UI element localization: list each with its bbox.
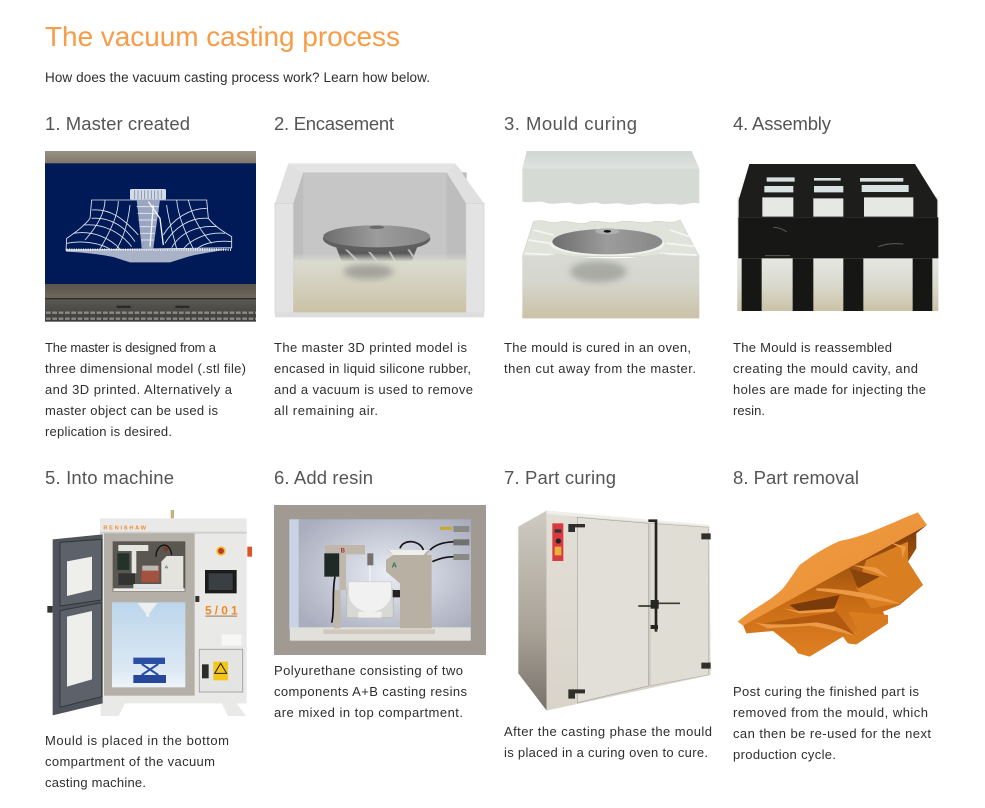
image: resin mixing compartment: A: [392, 560, 398, 569]
description: step 7: After the casting phase the mould: [504, 724, 712, 739]
description: step 5: [45, 733, 229, 790]
title: The vacuum casting process: [45, 21, 400, 52]
description: step 1: [45, 340, 246, 439]
heading: step 7: 7. Part curing: [504, 467, 616, 488]
intro text: How does the vacuum casting process work? Learn how below.: [45, 70, 430, 85]
image: taped mould block: [737, 164, 938, 311]
description: step 4: creating the mould cavity, and: [733, 361, 918, 376]
description: step 6: components A+B casting resins: [274, 684, 468, 699]
description: step 4: The Mould is reassembled: [733, 340, 892, 355]
description: step 7: is placed in a curing oven to cure.: [504, 745, 708, 760]
description: step 1: replication is desired.: [45, 424, 172, 439]
description: step 6: Polyurethane consisting of two: [274, 663, 463, 678]
image: cured mould cut open: [522, 151, 699, 318]
description: step 2: and a vacuum is used to remove: [274, 382, 473, 397]
description: step 8: removed from the mould, which: [733, 705, 928, 720]
description: step 5: casting machine.: [45, 775, 146, 790]
image: wireframe impeller on laptop screen: [45, 151, 256, 322]
description: step 2: encased in liquid silicone rubber,: [274, 361, 471, 376]
description: step 6: are mixed in top compartment.: [274, 705, 463, 720]
step 6: add resin: [274, 467, 486, 720]
description: step 1: The master is designed from a: [45, 340, 217, 355]
description: step 1: and 3D printed. Alternatively a: [45, 382, 233, 397]
heading: step 2: 2. Encasement: [274, 113, 394, 134]
description: step 5: Mould is placed in the bottom: [45, 733, 229, 748]
image: curing oven: [518, 511, 711, 711]
heading: step 3: 3. Mould curing: [504, 113, 637, 134]
description: step 8: Post curing the finished part is: [733, 684, 920, 699]
heading: step 6: 6. Add resin: [274, 467, 373, 488]
heading: step 5: 5. Into machine: [45, 467, 174, 488]
image: finished orange part: [738, 512, 927, 657]
description: step 5: compartment of the vacuum: [45, 754, 215, 769]
step 2: encasement: [274, 113, 484, 418]
image: vacuum casting machine: 5/01: [205, 604, 238, 618]
description: step 1: three dimensional model (.stl file): [45, 361, 246, 376]
description: step 6: [274, 663, 468, 720]
description: step 8: production cycle.: [733, 747, 836, 762]
description: step 4: [733, 340, 926, 418]
image: resin mixing compartment: [274, 505, 486, 655]
image: vacuum casting machine: [47, 510, 252, 716]
description: step 3: The mould is cured in an oven,: [504, 340, 691, 355]
heading: step 4: 4. Assembly: [733, 113, 832, 134]
description: step 8: [733, 684, 931, 762]
heading: step 1: 1. Master created: [45, 113, 190, 134]
description: step 3: [504, 340, 696, 376]
step 1: master created: [45, 113, 256, 439]
description: step 1: master object can be used is: [45, 403, 218, 418]
description: step 8: can then be re-used for the next: [733, 726, 931, 741]
description: step 2: all remaining air.: [274, 403, 378, 418]
step 5: into machine: [45, 467, 252, 790]
description: step 2: The master 3D printed model is: [274, 340, 468, 355]
step 4: assembly: [733, 113, 938, 418]
image: vacuum casting machine: RENISHAW: [103, 526, 147, 532]
step 3: mould curing: [504, 113, 699, 376]
step 7: part curing: [504, 467, 712, 760]
description: step 4: holes are made for injecting the: [733, 382, 926, 397]
image: master encased in silicone rubber: [275, 163, 484, 317]
description: step 2: [274, 340, 473, 418]
step 8: part removal: [733, 467, 931, 762]
description: step 4: resin.: [733, 403, 765, 418]
description: step 3: then cut away from the master.: [504, 361, 696, 376]
heading: step 8: 8. Part removal: [733, 467, 859, 488]
image: resin mixing compartment: B: [341, 548, 346, 554]
description: step 7: [504, 724, 712, 760]
image: vacuum casting machine: A: [165, 564, 169, 570]
